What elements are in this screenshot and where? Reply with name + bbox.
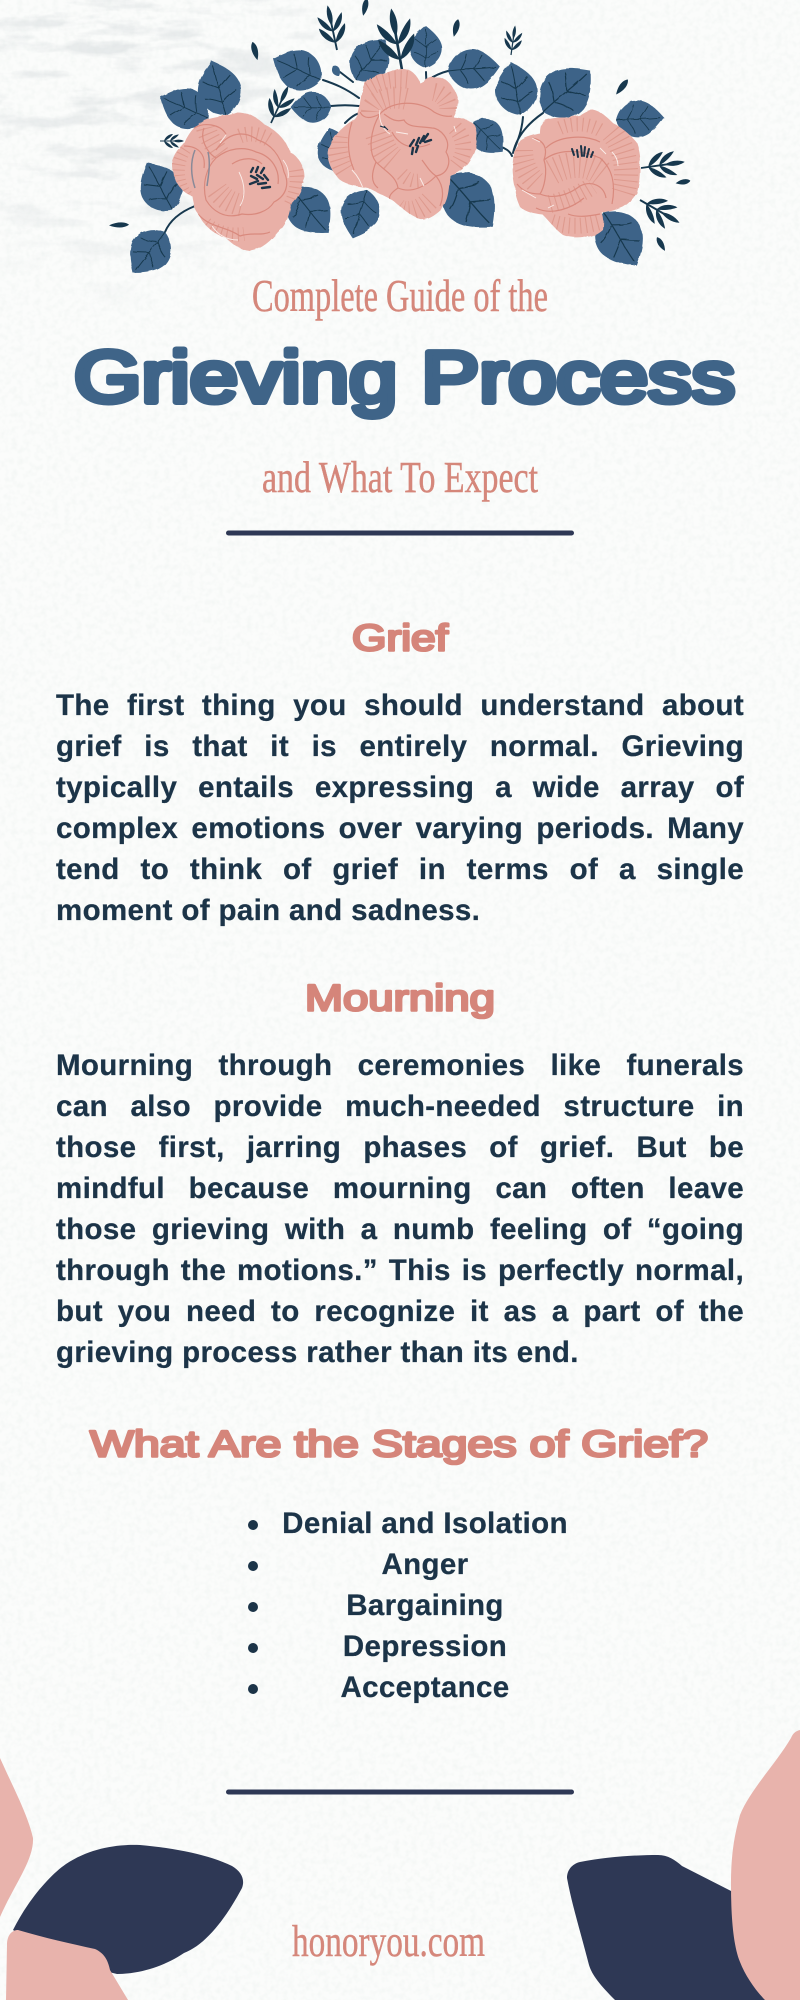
paragraph: mourning: those first, jarring phases of grief. But be — [56, 1131, 744, 1164]
paragraph: mourning — [56, 1049, 744, 1369]
paragraph: grief: complex emotions over varying periods. Many — [56, 812, 744, 845]
paragraph: grief: grief is that it is entirely normal. Grieving — [56, 730, 744, 763]
paragraph: mourning: Mourning through ceremonies like funerals — [56, 1049, 744, 1082]
heading: Grief: Grief — [352, 618, 449, 658]
list: stages of grief: Anger — [382, 1548, 468, 1581]
paragraph: mourning: can also provide much-needed structure in — [56, 1090, 744, 1123]
paragraph: grief: typically entails expressing a wide array of — [56, 771, 744, 804]
list: stages of grief — [248, 1507, 568, 1704]
footer shape: navy left — [13, 1845, 243, 1974]
paragraph: mourning: those grieving with a numb feeling of “going — [56, 1213, 744, 1246]
main title: Grieving Process — [74, 338, 735, 418]
website url: honoryou.com — [292, 1917, 485, 1966]
heading: Mourning: Mourning — [305, 978, 495, 1018]
footer shape: pink left — [0, 1758, 33, 1917]
footer shape: navy right — [567, 1855, 790, 2000]
list: stages of grief: Acceptance — [340, 1671, 510, 1704]
floral header illustration — [109, 0, 691, 285]
title line one: Complete Guide of the — [252, 271, 548, 321]
bottom divider — [226, 1790, 574, 1794]
stems — [165, 66, 543, 232]
paragraph: mourning: mindful because mourning can often leave — [56, 1172, 744, 1205]
list: stages of grief: Bargaining — [346, 1589, 504, 1622]
paragraph: grief — [56, 689, 744, 927]
list: stages of grief: Denial and Isolation — [282, 1507, 568, 1540]
footer shape: pink right — [731, 1730, 800, 2000]
middle rose — [328, 69, 477, 219]
right rose — [513, 110, 640, 237]
top divider — [226, 530, 574, 536]
paragraph: mourning: through the motions.” This is perfectly normal, — [56, 1254, 744, 1287]
heading: stages of grief: What Are the Stages of Grief? — [90, 1424, 708, 1464]
paragraph: grief: tend to think of grief in terms of a single — [56, 853, 744, 886]
left rose — [172, 112, 304, 251]
list: stages of grief: Depression — [343, 1630, 507, 1663]
title line three: and What To Expect — [262, 453, 538, 502]
paragraph: mourning: grieving process rather than its end. — [56, 1336, 579, 1369]
leaves — [117, 26, 665, 285]
paper texture background — [0, 0, 380, 295]
paragraph: grief: The first thing you should understand about — [56, 689, 744, 722]
paragraph: mourning: but you need to recognize it as a part of the — [56, 1295, 744, 1328]
footer shape: pink lower left — [6, 1930, 128, 2000]
sprigs and petals — [109, 0, 691, 252]
paragraph: grief: moment of pain and sadness. — [56, 894, 480, 927]
